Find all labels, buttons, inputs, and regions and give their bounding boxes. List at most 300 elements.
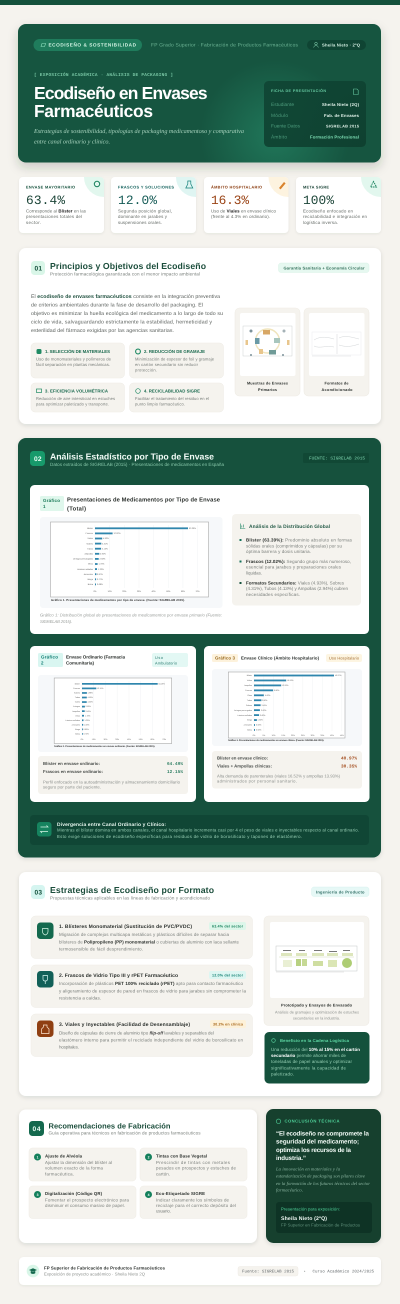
callout: divergencia entre canales (30, 815, 369, 845)
bar chart: total: Gráfico 1. Presentaciones de medicamentos por tipo de envase. (Fuente: SIGRELAB 2015). (51, 598, 185, 602)
recommendation 4 (140, 1186, 247, 1218)
icon: documento (354, 89, 358, 94)
source tag (303, 453, 369, 463)
stats: clínico: Alta demanda de parenterales (viales 16.52% y ampollas 13.93%) (217, 773, 341, 778)
intro paragraph: El ecodiseño de envases farmacéuticos consiste en la integración preventiva (31, 294, 220, 300)
panel: hero header (18, 24, 381, 162)
strategy 3: 30.2% en clínica (213, 1022, 244, 1026)
icon: graduación (27, 1265, 39, 1277)
panel: conclusión técnica (266, 1109, 381, 1243)
bar chart: total: Bolsa (88, 583, 94, 586)
principle 1: 1. SELECCIÓN DE MATERIALES (45, 349, 110, 354)
bar chart: total: 40% (152, 590, 156, 593)
quote: “El ecodiseño no compromete la (276, 1130, 370, 1138)
bar chart: clínico: Láminas selladas (237, 714, 252, 717)
badge: gráfico 3: Gráfico 3 (215, 655, 236, 660)
principle 3: 3. EFICIENCIA VOLUMÉTRICA (45, 388, 108, 394)
chart title: Envase Ordinario (Farmacia (66, 654, 125, 660)
badge: gráfico 2 (38, 653, 63, 667)
bar chart: ordinario: 1.30% (84, 719, 90, 722)
panel: ficha de presentación: Ámbito (271, 133, 287, 140)
callout: divergencia entre canales: Divergencia entre Canal Ordinario y Clínico: (57, 822, 166, 828)
panel: 03 estrategias de ecodiseño (19, 872, 381, 1096)
panel: KPI frascos y soluciones: suspensiones orales. (118, 220, 162, 225)
section number 01 (31, 261, 45, 275)
section heading (48, 1122, 201, 1136)
bar chart: clínico: Jeringas precargadas (234, 709, 252, 712)
panel: análisis de la distribución global: óptima barrera y dosis unitaria. (246, 549, 311, 554)
chart note: SIGRELAB 2015). (40, 619, 72, 624)
bar chart: ordinario: 64.49% (158, 682, 165, 686)
recommendation 4: 4 (148, 1193, 150, 1197)
section number 04: 04 (32, 1126, 41, 1133)
principle 4 (130, 383, 224, 412)
strategy 2: resistencia a caídas. (59, 996, 101, 1000)
principle 1 (31, 343, 124, 378)
recommendation 2: pesados en prospectos y estuches de (156, 1166, 237, 1171)
footer: Curso Académico 2024/2025 (312, 1269, 375, 1274)
panel: KPI envase mayoritario: sector. (26, 220, 41, 225)
bar chart: clínico (212, 669, 362, 746)
bar chart: total: Otros (88, 563, 93, 566)
badge: gráfico 1: 1 (43, 504, 46, 509)
section heading: Estrategias de Ecodiseño por Formato (50, 885, 214, 895)
principle 2: 2. REDUCCIÓN DE GRAMAJE (144, 349, 205, 354)
bar chart: total: 0.97% (97, 573, 103, 576)
panel: análisis de la distribución global (232, 514, 361, 606)
panel: KPI meta SIGRE: META SIGRE (303, 184, 329, 190)
bar chart: clínico: Viales (247, 679, 252, 682)
presenter box: FP Superior en Fabricación de Productos (281, 1222, 360, 1227)
image card: prototipado y ensayos (264, 916, 369, 1026)
bar chart: ordinario: Láminas selladas (65, 719, 80, 722)
author pill (307, 40, 366, 50)
bar chart: total: 63.39% (189, 527, 196, 530)
bar chart: clínico: Ampollas (244, 684, 252, 687)
bar chart: clínico: 0% (253, 734, 256, 737)
panel: ficha de presentación: FICHA DE PRESENTACIÓN (271, 88, 326, 93)
bar chart: ordinario: Frascos (73, 687, 80, 690)
bar chart: clínico: 15% (281, 734, 286, 737)
strategy 1: 1. Blísteres Monomaterial (Sustitución de PVC/PVDC) (59, 924, 192, 930)
bar chart: clínico: 13.93% (282, 684, 289, 687)
panel: KPI frascos y soluciones: 12.0% (118, 193, 157, 208)
stats: ordinario: 64.49% (167, 762, 183, 767)
bar chart: clínico: 5.00% (265, 694, 271, 697)
panel: ficha de presentación: SIGRELAB 2015 (326, 124, 360, 128)
bar chart: total: 1.33% (98, 568, 104, 571)
strategy 2: 12.0% del sector (212, 973, 244, 977)
callout: beneficio logístico: secundario permite ahorrar miles de (271, 1053, 346, 1058)
panel: ficha de presentación: Sheila Nieto (2Q) (322, 102, 360, 107)
icon: escudo (37, 922, 54, 939)
panel: ficha de presentación: Módulo (271, 113, 288, 119)
source tag (238, 1266, 298, 1276)
icon: intercambio (37, 822, 52, 836)
image card: formatos de acondicionado: Formatos de (324, 382, 348, 386)
bar chart: ordinario: Sobres (74, 692, 80, 695)
callout: divergencia entre canales: Mientras el blíster domina en ambos canales, el canal hospitalario incrementa casi por 4 el peso de viales e inyectables respecto al canal ordinario. (57, 828, 359, 833)
bar chart: ordinario: 40% (127, 738, 131, 741)
intro paragraph: ciclo de vida, salvaguardando estrictamente la estabilidad, hermeticidad y (31, 319, 212, 325)
recommendation 3: 3 (37, 1193, 39, 1197)
principle 3 (31, 383, 124, 412)
tag: ingeniería de producto (312, 887, 369, 896)
stats: ordinario: 12.15% (167, 770, 183, 775)
recommendation 2 (140, 1148, 247, 1181)
bar chart: clínico: 5% (262, 734, 265, 737)
strategy 1: blísteres de Polipropileno (PP) monomaterial o cubiertas de aluminio con laca sellante (59, 939, 239, 944)
tag: uso ambulatorio: Ambulatorio (155, 660, 177, 666)
principle 1: fácil separación en plantas mecánicas. (36, 362, 110, 367)
icon: frasco (37, 971, 54, 988)
stats: clínico: 40.97% (341, 756, 357, 762)
strategy 3 (31, 1014, 252, 1056)
bar chart: ordinario: 1.70% (85, 714, 91, 717)
stats: ordinario: Perfil enfocado en la autoadministración y almacenamiento domiciliario (43, 779, 181, 784)
section heading: Principios y Objetivos del Ecodiseño (50, 261, 206, 271)
bar chart: ordinario: Jeringas (73, 705, 80, 708)
stats: ordinario: seguro por parte del paciente. (43, 784, 101, 790)
tag: ingeniería de producto: Ingeniería de Producto (316, 889, 365, 894)
eyebrow: [ EXPOSICIÓN ACADÉMICA · ANÁLISIS DE PACKAGING ] (34, 72, 173, 78)
bar chart: clínico: 45% (340, 734, 344, 737)
strategy 3: Diseño de cápsulas de cierre de aluminio tipo flip-off lavables y separables del (59, 1030, 214, 1035)
bar chart: clínico: Bolsa (247, 729, 253, 732)
intro paragraph: esterilidad del fármaco exigidas por las agencias sanitarias. (31, 328, 174, 334)
title: Ecodiseño en Envases (34, 83, 208, 103)
intro paragraph (31, 294, 223, 334)
panel: ficha de presentación: Formación Profesional (310, 134, 359, 139)
recommendation 4: Indicar claramente los símbolos de (156, 1198, 230, 1202)
tag: uso ambulatorio (152, 653, 188, 667)
bar chart: ordinario: Viales (75, 701, 80, 704)
section heading (50, 261, 206, 276)
bar chart: clínico: 20% (291, 734, 295, 737)
section number 02 (30, 451, 45, 466)
recommendation 1 (29, 1148, 136, 1181)
panel: KPI ámbito hospitalario: ÁMBITO HOSPITALARIO (211, 184, 262, 190)
quote (276, 1130, 370, 1162)
stats: clínico: Blíster en envase clínico: (217, 756, 269, 760)
footer: FP Superior de Fabricación de Productos Farmacéuticos (44, 1266, 166, 1270)
bar chart: total (40, 517, 222, 608)
recommendation 3: disminuir el consumo masivo de papel. (45, 1203, 125, 1208)
title (34, 83, 208, 121)
chart title: Comunitaria) (66, 660, 94, 666)
panel: KPI envase mayoritario: presentaciones totales del (26, 214, 82, 219)
bar chart: ordinario: 10% (92, 738, 96, 741)
badge: ecodiseño y sostenibilidad: ECODISEÑO & SOSTENIBILIDAD (48, 41, 137, 47)
callout: beneficio logístico: significativamente la capacidad de (271, 1065, 346, 1070)
bar chart: total: Tubos (87, 547, 93, 550)
bar chart: ordinario: 30% (115, 738, 119, 741)
bar chart: ordinario: 4.50% (88, 696, 93, 699)
presenter box (276, 1202, 372, 1233)
bar chart: clínico: 0.50% (256, 729, 262, 732)
bar chart: total: 60% (181, 590, 185, 593)
source tag: FUENTE: SIGRELAB 2015 (309, 457, 365, 462)
bar chart: total: 0% (93, 590, 97, 593)
callout: beneficio logístico: toneladas de papel anuales y optimizar (271, 1059, 352, 1064)
bar chart: ordinario: 0% (81, 738, 84, 741)
recommendation 4: reciclaje para el correcto depósito del (156, 1203, 236, 1208)
bar chart: total: Aerosoles (84, 573, 93, 576)
bar chart: total: Láminas selladas (77, 568, 93, 571)
recommendation 1: farmacéutica. (45, 1171, 74, 1176)
badge: gráfico 2: 2 (41, 660, 44, 666)
strategy 2: y aligeramiento de espesor de pared en frascos de vidrio para jarabes sin comprometer la (59, 988, 246, 993)
bar chart: clínico: Tubos (247, 699, 252, 702)
panel: gráfico 3 envase clínico (204, 646, 370, 802)
image card: formatos de acondicionado (304, 308, 369, 396)
image card: muestras de envases (235, 308, 300, 396)
bar chart: ordinario: 4.20% (88, 701, 93, 704)
strategy 3: hospitales. (59, 1044, 79, 1050)
panel: KPI frascos y soluciones (111, 177, 196, 233)
bar chart: clínico: Gráfico 3. Presentaciones de medicamentos en envase clínico. (Fuente: SIGRELAB 2015). (228, 739, 324, 742)
section heading (50, 885, 214, 900)
bar chart: total: Sobres (86, 542, 93, 545)
bar chart: ordinario: 20% (104, 738, 108, 741)
strategy 1 (31, 916, 252, 958)
panel: 02 análisis estadístico (18, 438, 381, 858)
author pill: Sheila Nieto · 2ºQ (322, 42, 361, 47)
strategy 1: 63.4% del sector (212, 924, 244, 928)
bar chart: clínico: 3.00% (261, 709, 267, 712)
bar chart: clínico: Sobres (246, 704, 252, 707)
chart title (66, 654, 125, 666)
section heading: Guía operativa para técnicos en fabricación de productos farmacéuticos (48, 1130, 201, 1136)
tag: uso ambulatorio: Uso (155, 655, 163, 660)
tag: uso hospitalario (326, 654, 362, 662)
bar chart: ordinario: 4.98% (88, 692, 93, 695)
bar chart: total: Blister (87, 527, 93, 530)
bar chart: ordinario (38, 675, 188, 752)
bar chart: total: 50% (166, 590, 171, 593)
panel: conclusión técnica: CONCLUSIÓN TÉCNICA (284, 1119, 340, 1124)
panel: análisis de la distribución global: esencial para jarabes y preparaciones orales (246, 565, 342, 570)
bar chart: clínico: 2.60% (260, 714, 266, 717)
recommendation 1: Ajuste de Alvéola (45, 1154, 83, 1158)
strategy 2: Incorporación de plásticos PET 100% reciclado (rPET) apto para contacto farmacéutico (59, 981, 243, 986)
bar chart: clínico: Bingo (247, 719, 252, 722)
panel: análisis de la distribución global: líquidas. (246, 570, 262, 576)
panel: KPI meta SIGRE: logística inversa. (303, 220, 338, 225)
strategy 3: elastómero interno para permitir el reciclado independiente del vidrio de borosilicato en (59, 1037, 243, 1042)
image card: prototipado y ensayos: Prototipado y Ensayos de Envasado (281, 1002, 353, 1008)
callout: beneficio logístico: paletizado. (271, 1072, 294, 1076)
panel: KPI ámbito hospitalario: (frente al 4.3% en ordinario). (211, 214, 270, 219)
intro paragraph: de criterios ambientales durante la fase de desarrollo del packaging. El (31, 302, 203, 308)
bar chart: total: 1.75% (98, 563, 105, 566)
panel: KPI meta SIGRE: Ecodiseño enfocado en (303, 208, 354, 213)
bar chart: clínico: Aerosoles (244, 724, 252, 727)
principle 2: en cartón secundario sin reducir (135, 362, 199, 367)
bar chart: total: Frascos (86, 532, 93, 535)
bar chart: clínico: 3.80% (262, 699, 268, 702)
icon: check (276, 1119, 281, 1124)
bar chart: ordinario: 2.50% (86, 705, 91, 708)
panel: KPI frascos y soluciones: dominante en jarabes y (118, 214, 168, 219)
strategy 3: 3. Viales y Inyectables (Facilidad de Desensamblaje) (59, 1022, 190, 1028)
hero description: entre canal ordinario y clínico. (34, 138, 110, 146)
recommendation 1: 1 (37, 1155, 39, 1159)
bar chart: clínico: 35% (320, 734, 325, 737)
recommendation 2: cartón. (156, 1171, 170, 1176)
illustration: ciclo de envases (243, 326, 292, 356)
section number 03: 03 (34, 890, 42, 896)
bar chart: clínico: Otros (247, 694, 252, 697)
bar chart: total: 70% (196, 590, 200, 593)
recommendation 2: 2 (148, 1155, 150, 1159)
panel: análisis de la distribución global: necesidades específicas. (246, 592, 300, 597)
badge: gráfico 1 (40, 496, 64, 511)
bar chart: ordinario: Aerosoles (72, 723, 80, 726)
strategy 1: termosensible de fácil desprendimiento. (59, 946, 143, 952)
bar chart: total: 4.13% (102, 547, 108, 550)
section heading (50, 452, 224, 467)
principle 2: Minimización de espesor de foil y gramaje (135, 356, 215, 362)
bar chart: ordinario: Tubos (75, 696, 80, 699)
bar chart: total: 0.77% (97, 578, 103, 581)
section number 01: 01 (34, 266, 42, 272)
panel: KPI meta SIGRE (296, 177, 381, 233)
bar chart: total: 2.94% (100, 552, 106, 556)
section number 03 (31, 885, 45, 899)
principle 4: 4. RECICLABILIDAD SIGRE (144, 388, 200, 394)
bar chart: clínico: Frascos (245, 689, 252, 692)
quote note: estandarización de packaging son pilares clave (276, 1174, 365, 1178)
panel: ficha de presentación: Estudiante (271, 102, 294, 108)
panel: KPI envase mayoritario: Corresponde al Blister en las (26, 208, 87, 213)
panel: KPI envase mayoritario: ENVASE MAYORITARIO (26, 184, 75, 190)
image card: muestras de envases: Primarios (258, 388, 277, 392)
panel: KPI meta SIGRE: 100% (303, 193, 334, 208)
bar chart: clínico: 40% (330, 734, 334, 737)
chart title: (Total) (67, 505, 86, 512)
bar chart: total: 4.93% (103, 537, 109, 540)
bar chart: ordinario: 70% (162, 738, 166, 741)
chart title (67, 496, 221, 512)
bar chart: clínico: 40.97% (335, 674, 342, 677)
presenter box: Sheila Nieto (2ºQ) (281, 1216, 327, 1222)
section heading: Datos extraídos de SIGRELAB (2015) · Presentaciones de medicamentos en España (50, 462, 224, 467)
bar chart: clínico: 30% (311, 734, 315, 737)
panel: KPI frascos y soluciones: FRASCOS Y SOLUCIONES (118, 184, 174, 190)
image card: prototipado y ensayos: Análisis de gramajes y optimización de estuches (275, 1010, 359, 1014)
chart title: Envase Clínico (Ámbito Hospitalario) (241, 656, 320, 660)
hero description: Estrategias de sostenibilidad, tipologías de packaging medicamentoso y comparativa (33, 128, 244, 135)
bar chart: ordinario: 2.40% (86, 710, 91, 713)
top accent bar (0, 0, 400, 5)
image card: prototipado y ensayos: secundarios en la industria. (293, 1016, 340, 1020)
bar chart: ordinario: Bolsa (75, 732, 81, 736)
bar chart: ordinario: 12.15% (97, 687, 104, 690)
bar chart: ordinario: Gráfico 2. Presentaciones de medicamentos en envase ordinario. (Fuente: SIGRELAB 2015). (54, 745, 155, 748)
recommendation 4: usuario. (156, 1209, 171, 1214)
panel: KPI meta SIGRE: reciclabilidad e integración en (303, 214, 368, 219)
recommendation 3 (29, 1186, 136, 1218)
stats: ordinario (38, 756, 188, 794)
bar chart: clínico: 0.50% (256, 724, 262, 727)
icon: chart (240, 524, 245, 528)
bar chart: ordinario: Otros (75, 714, 80, 717)
panel: gráfico 2 envase ordinario (30, 646, 196, 802)
title: Farmacéuticos (34, 101, 153, 121)
panel: análisis de la distribución global: sólidas orales (comprimidos y cápsulas) por su (246, 543, 342, 548)
illustration: tabla de ensayos (276, 946, 357, 972)
intro paragraph: objetivo es minimizar la huella ecológica del medicamento a lo largo de todo su (31, 311, 223, 317)
bar chart: ordinario: Bingo (75, 728, 80, 731)
tag: uso hospitalario: Uso Hospitalario (329, 655, 359, 660)
panel: análisis de la distribución global: (4.31%), Tubos (4.13%) y Ampollas (2.94%) cubren (246, 586, 348, 591)
panel: análisis de la distribución global: Frascos (12.02%): Segundo grupo más numeroso, (246, 559, 351, 564)
stats: clínico: Viales + Ampollas clínicas: (217, 764, 273, 768)
panel: ficha de presentación: Fuente Datos (271, 124, 301, 130)
image card: formatos de acondicionado: Acondicionado (322, 388, 353, 392)
section heading: Recomendaciones de Fabricación (48, 1122, 171, 1130)
badge: gráfico 1: Gráfico (43, 498, 60, 503)
panel: análisis de la distribución global: Análisis de la Distribución Global (249, 524, 331, 530)
quote note: en la formación de los futuros técnicos del sector (276, 1181, 370, 1186)
bar chart: total: Viales (87, 537, 93, 540)
stats: ordinario: Blíster en envase ordinario: (43, 761, 101, 766)
bar chart: clínico: 10% (272, 734, 276, 737)
stats: clínico: 30.35% (341, 764, 357, 770)
bar chart: total: 30% (137, 590, 141, 593)
section number 04 (29, 1121, 44, 1136)
strategy 2 (31, 965, 252, 1008)
footer: Exposición de proyecto académico · Sheila Nieto 2Q (44, 1271, 146, 1276)
section heading: Propuestas técnicas aplicables en las líneas de fabricación y acondicionado (50, 895, 210, 900)
stats: ordinario: Frascos en envase ordinario: (43, 769, 104, 774)
quote: seguridad del medicamento; (276, 1139, 359, 1146)
panel: KPI envase mayoritario (19, 177, 104, 233)
callout: beneficio logístico (264, 1032, 370, 1084)
bar chart: ordinario: 60% (151, 738, 155, 741)
panel: análisis de la distribución global: Blister (63.39%): Predominio absoluto en formas (246, 537, 353, 542)
bar chart: total: Bingo (88, 578, 94, 581)
tag: garantía sanitaria (278, 263, 369, 272)
quote: optimiza los recursos de la (276, 1147, 352, 1154)
panel: KPI envase mayoritario: 63.4% (26, 193, 65, 208)
bar chart: ordinario: 1.00% (84, 723, 90, 726)
principle 4: Facilitar el tratamiento del residuo en el (135, 396, 209, 401)
icon: vial (37, 1020, 54, 1037)
panel: KPI frascos y soluciones: Segunda posición global, (118, 208, 172, 213)
bar chart: ordinario: Blister (75, 682, 80, 686)
bar chart: ordinario: 0.80% (84, 728, 89, 731)
principle 2: protección. (135, 368, 157, 372)
panel: KPI ámbito hospitalario: Uso de Viales en envase clínico (211, 208, 277, 213)
principle 2 (130, 343, 224, 378)
source tag: Fuente: SIGRELAB 2015 (242, 1269, 295, 1274)
strategy 1: Migración de complejos multicapa metálicos y plásticos difíciles de separar hacia (59, 932, 229, 937)
principle 4: punto limpio farmacéutico. (135, 401, 185, 406)
panel: ficha de presentación: Fab. de Envases (324, 113, 360, 118)
footer (19, 1257, 381, 1285)
principle 3: Reducción de aire intersticial en estuches (36, 396, 115, 401)
bar chart: total: 4.31% (102, 542, 108, 545)
quote: industria.” (276, 1155, 306, 1162)
bar chart: ordinario: 50% (139, 738, 143, 741)
recommendation 3: Fomentar el prospecto electrónico para (45, 1198, 130, 1202)
bar chart: clínico: 9.80% (274, 689, 280, 692)
bar chart: ordinario: Ampollas (72, 710, 80, 713)
panel: KPI ámbito hospitalario (204, 177, 288, 233)
stats: clínico: administrados por personal sanitario. (217, 778, 297, 784)
